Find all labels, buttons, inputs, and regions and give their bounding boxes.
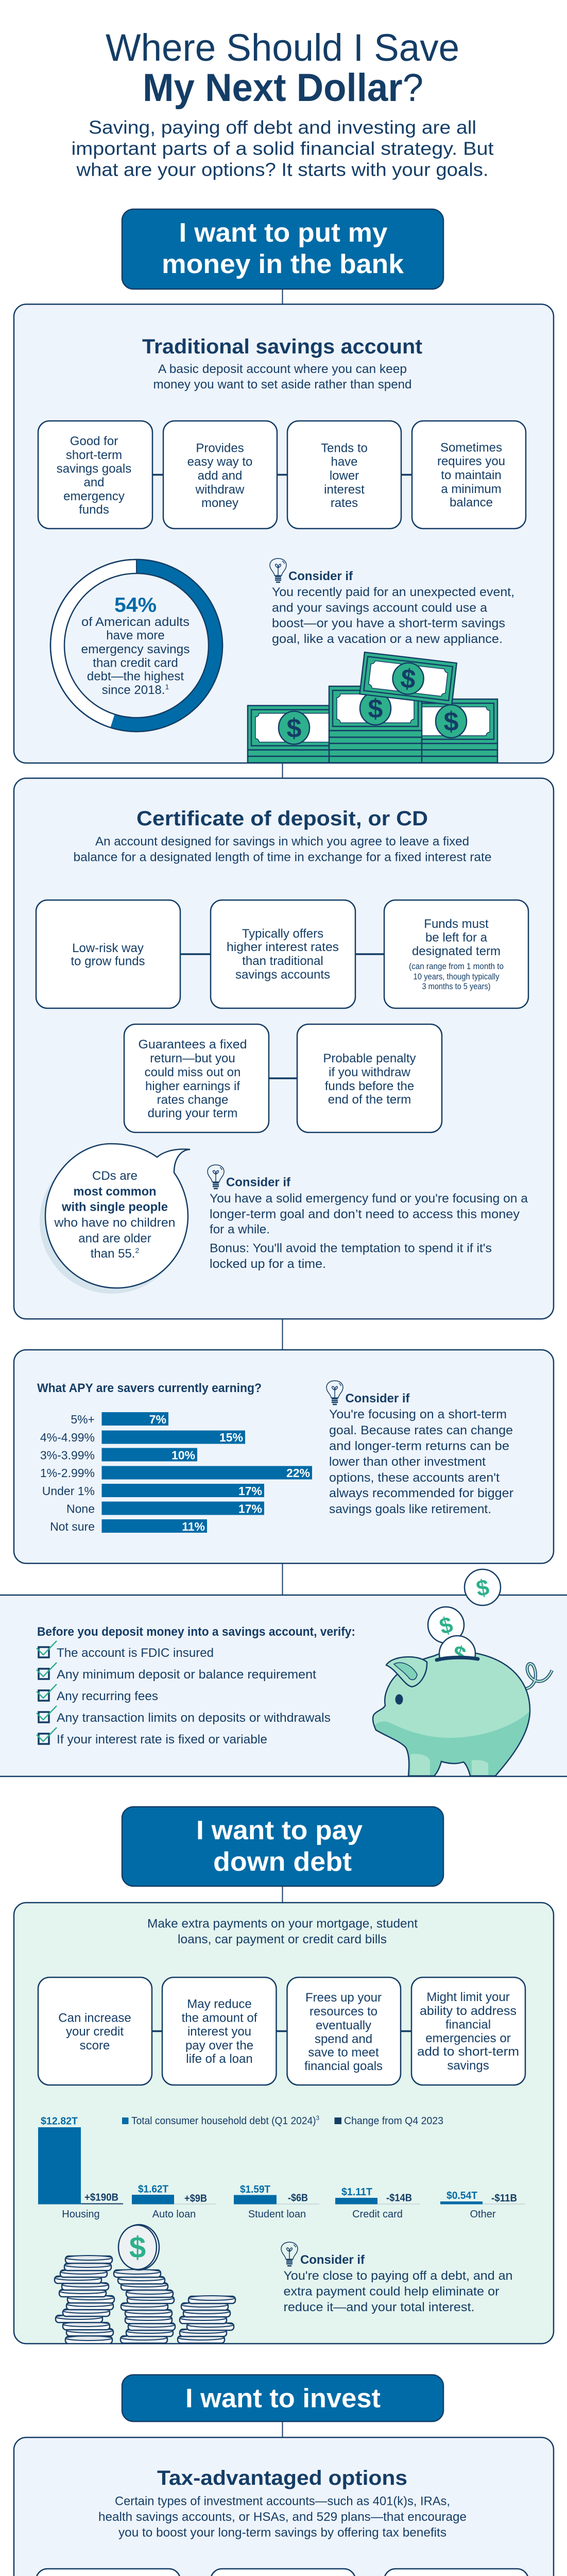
illustration: coin stacks [55, 2225, 235, 2344]
donut stat: 54%: than credit card [93, 656, 178, 670]
bar chart: consumer debt: Housing [62, 2209, 100, 2220]
section button: bank [122, 209, 443, 289]
feature boxes: spend and [315, 2032, 372, 2046]
feature boxes: requires you [437, 454, 505, 468]
bar chart: consumer debt: Student loan [248, 2209, 306, 2220]
description: Make extra payments on your mortgage, student [147, 1917, 418, 1931]
feature boxes: savings goals [57, 462, 131, 476]
feature boxes: to grow funds [71, 954, 145, 969]
consider if: savings rates: Consider if [345, 1392, 410, 1405]
panel: traditional savings account [14, 304, 554, 763]
feature boxes: pay over the [185, 2039, 253, 2053]
panel: APY chart [14, 1350, 554, 1563]
title: My Next Dollar? [143, 66, 423, 110]
donut stat: 54%: 54% [114, 594, 157, 616]
feature boxes: short-term [66, 448, 122, 462]
feature boxes: withdraw [195, 483, 245, 497]
bar chart: consumer debt: Auto loan [152, 2209, 196, 2220]
donut stat: 54%: since 2018. [102, 683, 165, 697]
bar chart: consumer debt: $1.11T [341, 2187, 372, 2198]
section button: debt: I want to pay [196, 1816, 363, 1845]
feature boxes: Might limit your [426, 1990, 510, 2004]
description: balance for a designated length of time in exchange for a fixed interest rate [73, 850, 491, 865]
feature boxes: 3 months to 5 years) [422, 982, 490, 991]
feature boxes: and [83, 476, 105, 489]
feature boxes: Typically offers [242, 927, 323, 941]
connector [282, 763, 283, 778]
description [73, 835, 491, 865]
checklist: Any transaction limits on deposits or withdrawals [57, 1711, 331, 1725]
feature boxes: the amount of [182, 2011, 257, 2025]
feature boxes: add to short-term [417, 2045, 519, 2059]
description: An account designed for savings in which you agree to leave a fixed [95, 835, 469, 849]
description: money you want to set aside rather than spend [153, 378, 412, 392]
feature boxes: score [80, 2039, 110, 2053]
feature boxes: Tends to [321, 441, 368, 455]
feature boxes: save to meet [308, 2045, 379, 2060]
feature boxes: financial [445, 2018, 491, 2032]
checklist: Any recurring fees [57, 1689, 158, 1703]
feature boxes: life of a loan [186, 2052, 253, 2066]
section button: debt [122, 1807, 443, 1886]
feature boxes [38, 1977, 525, 2085]
description: Certain types of investment accounts—such as 401(k)s, IRAs, [115, 2495, 450, 2508]
consider if: CD: locked up for a time. [210, 1257, 326, 1271]
bar chart: APY: Under 1% [42, 1484, 95, 1498]
feature boxes: emergencies or [425, 2031, 511, 2045]
feature boxes: funds [79, 503, 109, 517]
consider if: debt: extra payment could help eliminate or [283, 2284, 500, 2299]
consider if: debt: Consider if [300, 2253, 365, 2267]
feature boxes [36, 2569, 528, 2576]
panel: tax-advantaged options [14, 2437, 554, 2576]
title: Where Should I Save [106, 26, 459, 69]
bar chart: consumer debt [38, 2115, 525, 2220]
consider if: savings: Consider if [288, 569, 353, 583]
consider if: savings rates: options, these accounts aren't [329, 1471, 500, 1485]
bar chart: APY: 15% [219, 1431, 243, 1444]
panel: certificate of deposit [14, 778, 554, 1319]
consider if: CD: Consider if [226, 1176, 291, 1189]
connector [282, 1319, 283, 1350]
connector [282, 1563, 283, 1595]
section button: bank: I want to put my [179, 218, 388, 248]
feature boxes: May reduce [187, 1997, 252, 2011]
chart legend: Total consumer household debt (Q1 2024) [131, 2115, 324, 2127]
bar chart: consumer debt: $12.82T [41, 2115, 78, 2127]
panel: pay down debt [14, 1903, 554, 2344]
description [98, 2495, 467, 2540]
connector [282, 2421, 283, 2437]
feature boxes: have [331, 455, 358, 469]
bar chart: APY: 17% [238, 1484, 262, 1498]
consider if: savings: boost—or you have a short-term savings [272, 616, 505, 631]
consider if: savings rates: savings goals like retirement. [329, 1502, 491, 1516]
bar chart: consumer debt: Other [470, 2209, 496, 2220]
feature boxes: easy way to [187, 455, 252, 469]
feature boxes: a minimum [441, 482, 502, 496]
feature boxes: higher earnings if [145, 1079, 240, 1093]
consider if: savings rates: lower than other investment [329, 1455, 486, 1469]
description: loans, car payment or credit card bills [178, 1933, 387, 1946]
feature boxes: higher interest rates [227, 940, 339, 954]
consider if: CD [208, 1165, 528, 1271]
description: you to boost your long-term savings by offering tax benefits [118, 2526, 446, 2540]
feature boxes: be left for a [425, 930, 488, 945]
bar chart: consumer debt: -$14B [386, 2193, 412, 2204]
feature boxes: end of the term [328, 1093, 411, 1107]
bar chart: APY: None [66, 1502, 95, 1516]
bar chart: consumer debt: -$11B [491, 2193, 517, 2204]
feature boxes: savings [447, 2059, 489, 2073]
consider if: savings: and your savings account could use a [272, 601, 488, 615]
checklist: Any minimum deposit or balance requirement [57, 1668, 316, 1682]
consider if: savings [270, 558, 514, 646]
speech bubble: CD stat: most common [73, 1185, 157, 1198]
bar chart: consumer debt: Credit card [352, 2209, 403, 2220]
consider if: debt: You're close to paying off a debt, and an [283, 2269, 513, 2283]
band: checklist [0, 1569, 567, 1777]
illustration: stacks of cash: $ [399, 664, 417, 695]
feature boxes: during your term [148, 1107, 237, 1120]
heading: Traditional savings account [142, 335, 422, 358]
feature boxes: than traditional [242, 954, 323, 968]
bar chart: APY: 4%-4.99% [40, 1431, 95, 1444]
consider if: savings: goal, like a vacation or a new appliance. [272, 632, 503, 646]
feature boxes: to maintain [441, 468, 502, 482]
chart legend: Change from Q4 2023 [344, 2115, 443, 2127]
illustration: coin stacks: $ [129, 2231, 146, 2264]
feature boxes: funds before the [325, 1079, 414, 1093]
consider if: CD: longer-term goal and don’t need to access this money [210, 1208, 520, 1221]
speech bubble: CD stat: 2 [135, 1246, 139, 1255]
feature boxes: return—but you [150, 1052, 235, 1065]
feature boxes: Funds must [424, 917, 489, 931]
title [106, 26, 459, 110]
bar chart: consumer debt: $1.62T [138, 2183, 168, 2195]
illustration: piggy bank and coins: $ [474, 1574, 491, 1602]
bar chart: APY: Not sure [50, 1520, 95, 1533]
section button: invest: I want to invest [185, 2383, 381, 2413]
consider if: debt: reduce it—and your total interest. [283, 2300, 475, 2314]
speech bubble: CD stat [40, 1144, 190, 1294]
connector [282, 1886, 283, 1903]
section button: invest [122, 2375, 443, 2421]
feature boxes: (can range from 1 month to [409, 962, 504, 971]
feature boxes: could miss out on [145, 1065, 240, 1079]
feature boxes: financial goals [304, 2059, 383, 2073]
bar chart: APY [40, 1412, 312, 1533]
illustration: piggy bank and coins: $ [437, 1612, 456, 1639]
feature boxes: eventually [316, 2019, 371, 2032]
feature boxes [36, 900, 528, 1132]
bar chart: consumer debt: +$190B [84, 2192, 118, 2203]
bar chart: consumer debt: -$6B [288, 2193, 308, 2204]
feature boxes: add and [198, 469, 242, 483]
consider if: CD: for a while. [210, 1223, 270, 1236]
feature boxes: designated term [412, 944, 501, 958]
heading: Certificate of deposit, or CD [136, 807, 428, 830]
feature boxes: your credit [66, 2025, 124, 2039]
checklist [37, 1641, 331, 1747]
donut stat: 54%: debt—the highest [87, 670, 184, 683]
consider if: savings rates: You're focusing on a short-term [329, 1408, 507, 1421]
bar chart: consumer debt: $0.54T [446, 2190, 477, 2201]
feature boxes: Frees up your [305, 1991, 382, 2005]
illustration: piggy bank and coins: $ [450, 1641, 469, 1668]
donut stat: 54% [50, 560, 222, 732]
feature boxes: 10 years, though typically [413, 972, 500, 981]
feature boxes: Low-risk way [72, 941, 144, 955]
consider if: CD: You have a solid emergency fund or you're focusing on a [210, 1192, 528, 1206]
feature boxes: lower [330, 469, 359, 483]
description: health savings accounts, or HSAs, and 529 plans—that encourage [98, 2510, 467, 2524]
chart legend: 3 [316, 2114, 319, 2122]
illustration: stacks of cash: $ [287, 714, 302, 743]
speech bubble: CD stat: than 55. [91, 1247, 135, 1261]
intro text: Saving, paying off debt and investing are all [89, 116, 476, 138]
feature boxes: rates change [157, 1093, 228, 1107]
consider if: savings rates: goal. Because rates can change [329, 1423, 513, 1437]
feature boxes: balance [450, 496, 493, 510]
feature boxes: Guarantees a fixed [138, 1038, 247, 1052]
feature boxes: Can increase [58, 2011, 131, 2025]
illustration: stacks of cash [248, 652, 497, 762]
consider if: savings rates: and longer-term returns can be [329, 1439, 509, 1453]
feature boxes: rates [331, 496, 358, 510]
donut stat: 54%: emergency savings [81, 642, 190, 656]
bar chart: consumer debt: +$9B [184, 2193, 207, 2204]
donut stat: 54%: of American adults [81, 615, 190, 629]
speech bubble: CD stat: who have no children [54, 1216, 175, 1230]
speech bubble: CD stat: with single people [61, 1200, 168, 1214]
illustration: stacks of cash: $ [444, 707, 459, 737]
heading: Tax-advantaged options [157, 2467, 407, 2489]
consider if: savings: You recently paid for an unexpected event, [272, 585, 514, 599]
description [153, 362, 412, 392]
illustration: stacks of cash: $ [368, 694, 383, 724]
consider if: CD: Bonus: You'll avoid the temptation to spend it if it's [210, 1242, 492, 1255]
bar chart: APY: 22% [286, 1466, 310, 1480]
donut stat: 54%: have more [106, 629, 165, 642]
illustration: piggy bank and coins [373, 1569, 552, 1777]
checklist: The account is FDIC insured [57, 1646, 214, 1660]
consider if: savings rates [327, 1381, 513, 1516]
checklist: If your interest rate is fixed or variable [57, 1733, 267, 1747]
donut stat: 54%: 1 [165, 683, 169, 691]
feature boxes [38, 421, 526, 529]
bar chart: consumer debt: $1.59T [240, 2184, 270, 2195]
connector [282, 289, 283, 304]
feature boxes: Sometimes [440, 441, 502, 454]
feature boxes: interest [324, 483, 365, 497]
intro text: important parts of a solid financial strategy. But [71, 138, 493, 159]
consider if: debt [281, 2242, 513, 2314]
feature boxes: interest you [187, 2025, 251, 2039]
speech bubble: CD stat: and are older [78, 1231, 151, 1246]
section button: debt: down debt [213, 1847, 352, 1877]
feature boxes: money [201, 496, 238, 510]
feature boxes: emergency [63, 489, 125, 503]
checklist heading: Before you deposit money into a savings account, verify: [37, 1625, 355, 1639]
bar chart: APY: 5%+ [71, 1413, 95, 1426]
bar chart: APY: 10% [171, 1449, 195, 1462]
feature boxes: resources to [310, 2005, 377, 2019]
bar chart: APY: 1%-2.99% [40, 1466, 95, 1480]
feature boxes: if you withdraw [329, 1065, 411, 1079]
description: A basic deposit account where you can keep [158, 362, 407, 376]
bar chart: APY: 3%-3.99% [40, 1449, 95, 1462]
chart legend [122, 2114, 443, 2127]
bar chart: APY: 7% [149, 1413, 166, 1426]
feature boxes: Probable penalty [323, 1052, 416, 1065]
section button: bank: money in the bank [162, 249, 404, 279]
feature boxes: ability to address [420, 2004, 517, 2018]
bar chart: APY: 17% [238, 1502, 262, 1516]
intro text: what are your options? It starts with your goals. [76, 159, 488, 180]
speech bubble: CD stat: CDs are [92, 1169, 138, 1183]
feature boxes: Provides [196, 441, 244, 455]
consider if: savings rates: always recommended for bigger [329, 1486, 513, 1500]
description [147, 1917, 418, 1946]
feature boxes: Good for [70, 434, 118, 448]
chart title: What APY are savers currently earning? [37, 1381, 262, 1395]
bar chart: APY: 11% [182, 1520, 205, 1533]
feature boxes: savings accounts [235, 968, 330, 982]
intro text [71, 116, 493, 180]
